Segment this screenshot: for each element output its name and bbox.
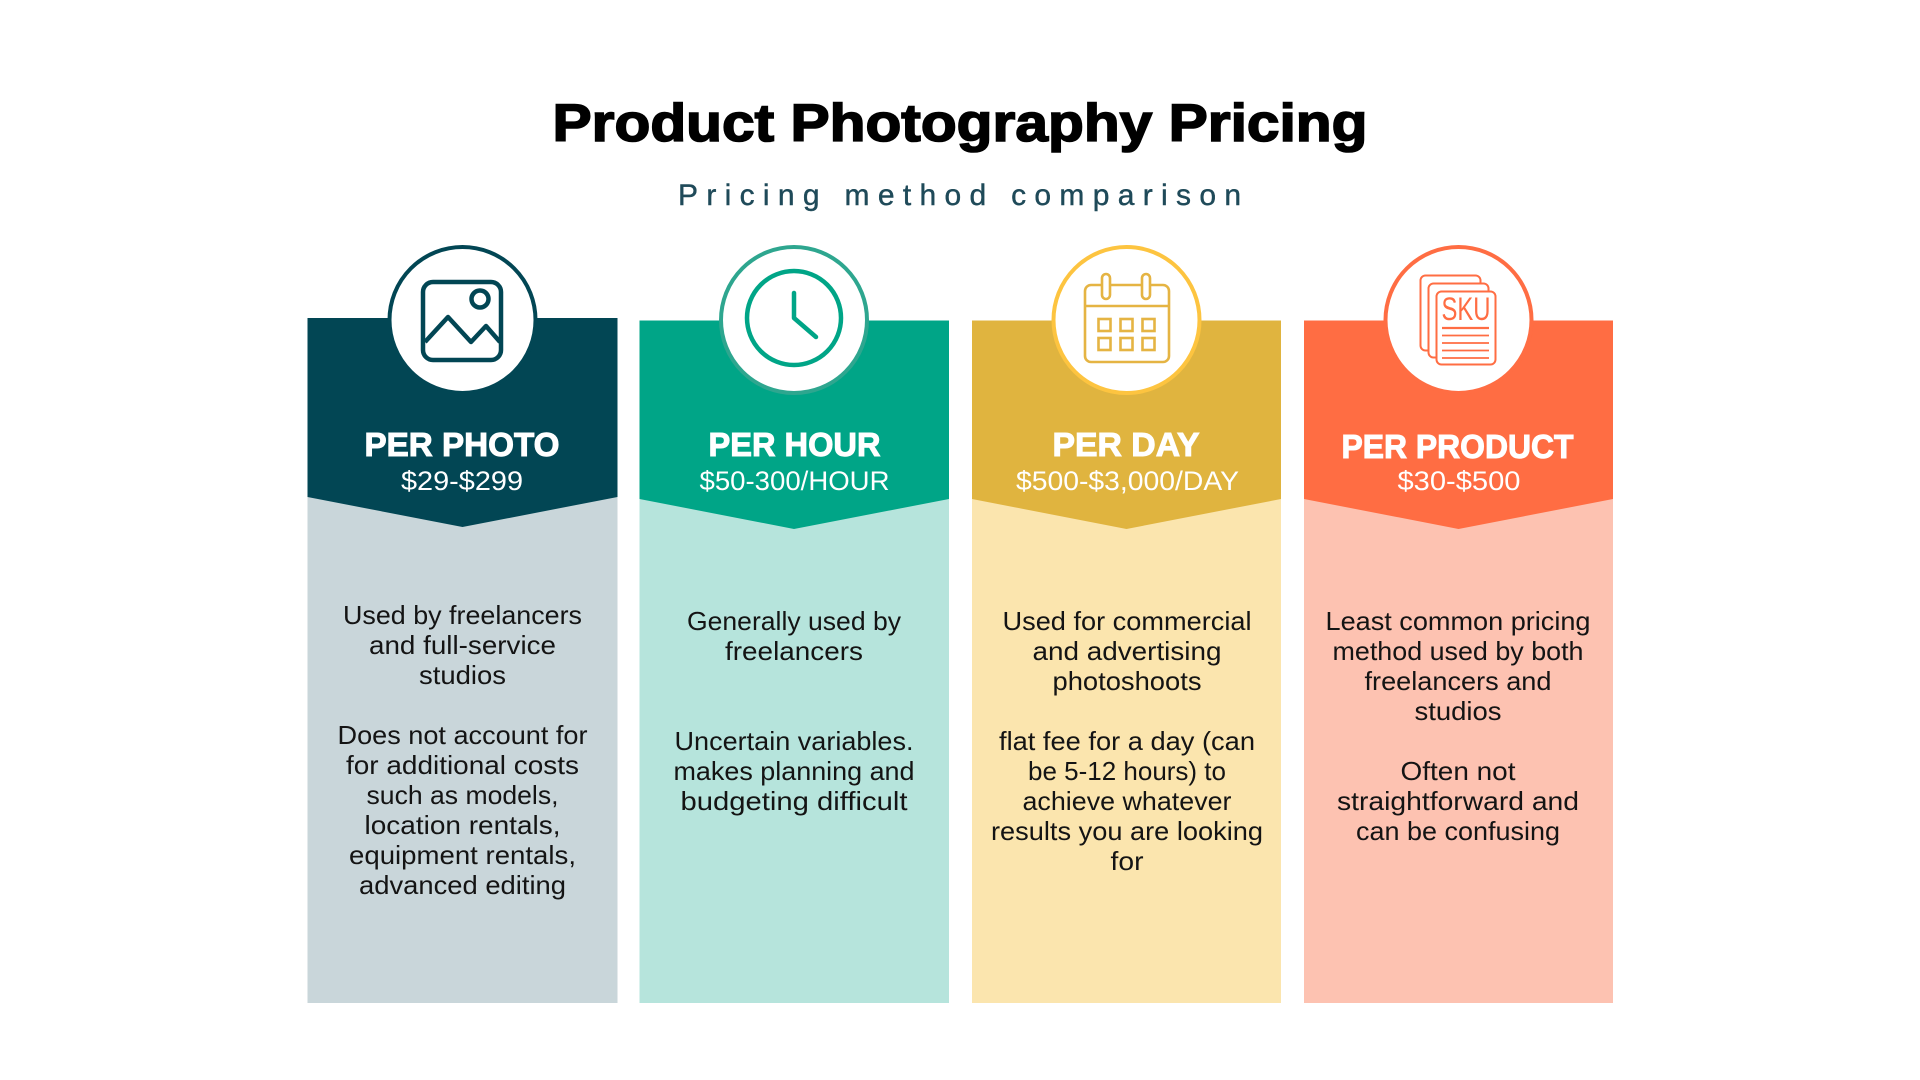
- panel: per day: [972, 247, 1281, 1003]
- subtitle: Pricing method comparison: [678, 179, 1241, 212]
- panel body: [308, 480, 618, 1003]
- panel: per hour: [640, 247, 949, 1003]
- text: per day notes: [991, 606, 1263, 876]
- panel: per product: [1304, 247, 1613, 1003]
- icon: SKU sheets: SKU: [1442, 291, 1490, 327]
- text: per day notes: for: [1110, 846, 1144, 876]
- text: per photo notes: equipment rentals,: [349, 840, 576, 870]
- text: per photo notes: and full-service: [369, 630, 556, 660]
- text: per product notes: studios: [1414, 696, 1502, 726]
- text: per photo notes: Used by freelancers: [343, 600, 582, 630]
- title: Product Photography Pricing: [552, 94, 1368, 153]
- icon: picture: [390, 247, 536, 393]
- text: per product notes: method used by both: [1332, 636, 1584, 666]
- text: per day notes: results you are looking: [991, 816, 1263, 846]
- text: per photo notes: Does not account for: [338, 720, 588, 750]
- text: per photo notes: studios: [419, 660, 506, 690]
- panel header: [1304, 320, 1613, 529]
- panel body: [640, 480, 949, 1003]
- icon: SKU sheets: [1386, 247, 1532, 393]
- heading: per product: PER PRODUCT: [1342, 428, 1574, 465]
- text: per hour notes: makes planning and: [674, 756, 914, 786]
- panel header: [972, 320, 1281, 529]
- text: per product notes: [1326, 606, 1590, 846]
- panel: per photo: [308, 247, 618, 1003]
- icon: calendar: [1054, 247, 1200, 393]
- text: per photo notes: such as models,: [366, 780, 558, 810]
- price: per photo: $29-$299: [401, 466, 523, 496]
- text: per hour notes: Generally used by: [687, 606, 901, 636]
- text: per hour notes: freelancers: [725, 636, 863, 666]
- price: per hour: $50-300/HOUR: [700, 466, 890, 496]
- panel body: [972, 480, 1281, 1003]
- text: per day notes: Used for commercial: [1002, 606, 1252, 636]
- panel header: [640, 320, 949, 529]
- text: per day notes: be 5-12 hours) to: [1028, 756, 1226, 786]
- panel body: [1304, 480, 1613, 1003]
- text: per photo notes: for additional costs: [346, 750, 579, 780]
- text: per product notes: freelancers and: [1364, 666, 1552, 696]
- text: per product notes: Least common pricing: [1326, 606, 1590, 636]
- text: per day notes: flat fee for a day (can: [999, 726, 1255, 756]
- text: per photo notes: location rentals,: [364, 810, 560, 840]
- text: per product notes: straightforward and: [1337, 786, 1579, 816]
- text: per photo notes: advanced editing: [359, 870, 566, 900]
- text: per product notes: Often not: [1400, 756, 1516, 786]
- panel header: [308, 318, 618, 527]
- text: per day notes: and advertising: [1032, 636, 1222, 666]
- text: per day notes: achieve whatever: [1022, 786, 1232, 816]
- price: per day: $500-$3,000/DAY: [1016, 466, 1239, 496]
- icon: clock: [721, 247, 867, 393]
- text: per hour notes: Uncertain variables.: [674, 726, 914, 756]
- text: per photo notes: [338, 600, 588, 900]
- text: per product notes: can be confusing: [1356, 816, 1560, 846]
- text: per hour notes: [674, 606, 914, 816]
- price: per product: $30-$500: [1398, 466, 1520, 496]
- text: per day notes: photoshoots: [1052, 666, 1202, 696]
- heading: per hour: PER HOUR: [708, 426, 881, 463]
- heading: per day: PER DAY: [1052, 426, 1200, 463]
- heading: per photo: PER PHOTO: [364, 426, 560, 463]
- text: per hour notes: budgeting difficult: [680, 786, 908, 816]
